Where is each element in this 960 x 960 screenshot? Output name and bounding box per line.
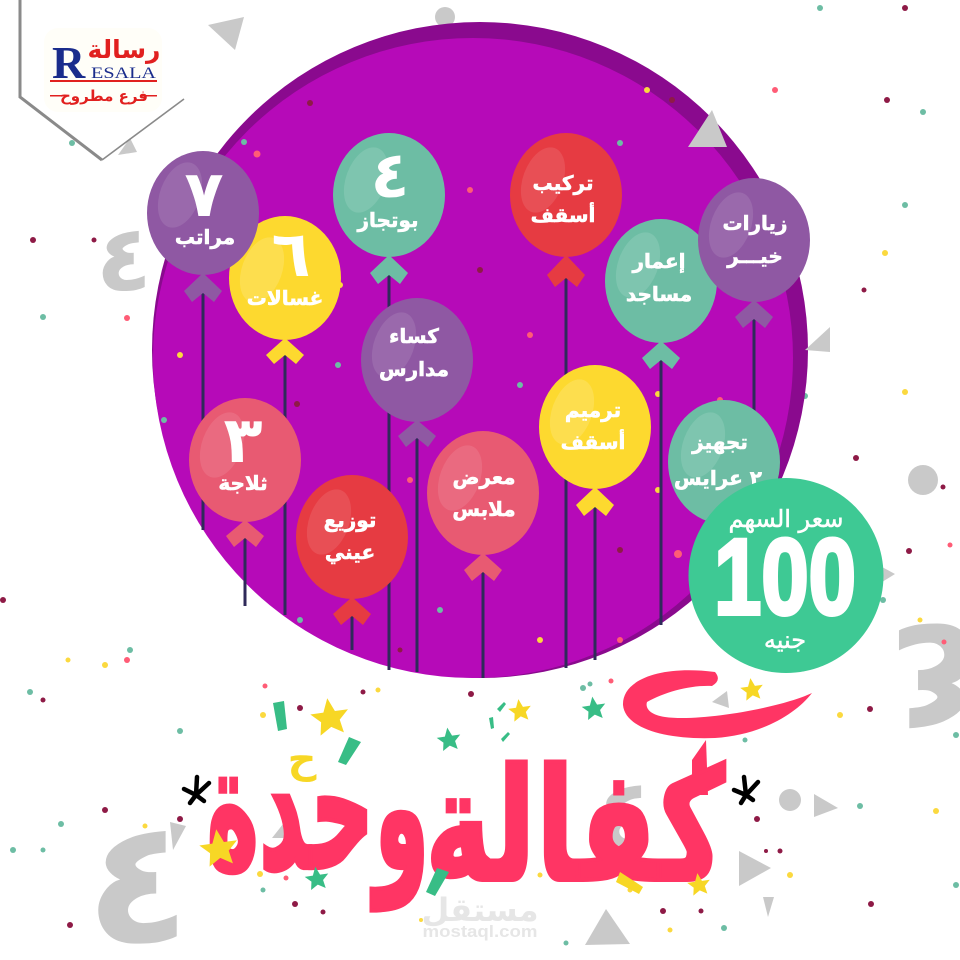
logo: Resala: ESALA [91,65,157,82]
balloon: bride preparation: ٢ عرايس [674,466,762,490]
share price badge: 100 [714,516,856,637]
balloon: in-kind distribution [296,475,408,650]
logo pentagon frame [20,0,184,160]
balloon: in-kind distribution: توزيع [324,508,376,532]
balloon: 4 stoves [333,133,445,670]
balloon: school clothes: مدارس [379,357,449,381]
confetti bars [273,701,643,896]
share price badge: سعر السهم [729,505,843,533]
balloon: 6 washing machines: ٦ [271,218,311,292]
black asterisks [184,777,758,803]
balloon: charity visits: زيارات [722,211,788,235]
balloon: 3 fridges: ٣ [223,404,263,478]
balloon: roof repair: أسقف [561,428,625,454]
stars [197,677,765,896]
balloon: 6 washing machines: غسالات [247,286,323,310]
balloon: 7 salaries [147,151,259,530]
balloon: school clothes: كساء [389,324,439,348]
balloon: 7 salaries: مراتب [175,225,235,249]
title lettering: sponsor a unit: كفالة [425,737,726,918]
logo: Resala: فرع مطروح [60,87,148,105]
title lettering: sponsor a unit [207,670,812,918]
balloon: clothes fair: معرض [452,465,516,489]
balloon: roof installation [510,133,622,668]
balloon: 6 washing machines [229,216,341,615]
balloon: roof repair: ترميم [565,398,621,422]
balloon: mosque building: إعمار [632,249,685,273]
background grey confetti shapes: ٤ [594,757,656,874]
balloon: bride preparation [668,400,780,524]
logo: Resala: R [52,37,86,88]
watermark: mostaql.com [422,922,538,941]
balloon: 3 fridges [189,398,301,606]
balloon: clothes fair [427,431,539,678]
balloon: mosque building: مساجد [626,282,692,306]
balloon: charity visits [698,178,810,420]
balloon: clothes fair: ملابس [452,497,516,521]
balloon: bride preparation: تجهيز [691,430,748,454]
title lettering: sponsor a unit: وحدة [207,707,429,911]
main purple circle [152,22,830,678]
logo: Resala [44,28,162,112]
balloon: school clothes [361,298,473,672]
balloon: roof installation: تركيب [533,171,593,195]
balloon: 4 stoves: بوتجاز [356,208,418,232]
balloon: roof installation: أسقف [531,201,595,227]
background grey confetti shapes: ٤ [96,205,152,312]
balloon: roof repair [539,365,651,660]
small yellow letter: ح [288,736,317,782]
balloon: charity visits: خيـــر [726,244,783,268]
balloon: 3 fridges: ثلاجة [218,471,268,495]
balloon: in-kind distribution: عيني [325,540,375,565]
logo: Resala: رسالة [88,35,160,64]
share price badge: جنيه [764,626,806,654]
balloon: mosque building [605,219,717,625]
watermark: مستقل [421,891,539,929]
balloon: 4 stoves: ٤ [370,139,410,213]
balloon: 7 salaries: ٧ [184,158,224,232]
share price badge [688,478,884,673]
